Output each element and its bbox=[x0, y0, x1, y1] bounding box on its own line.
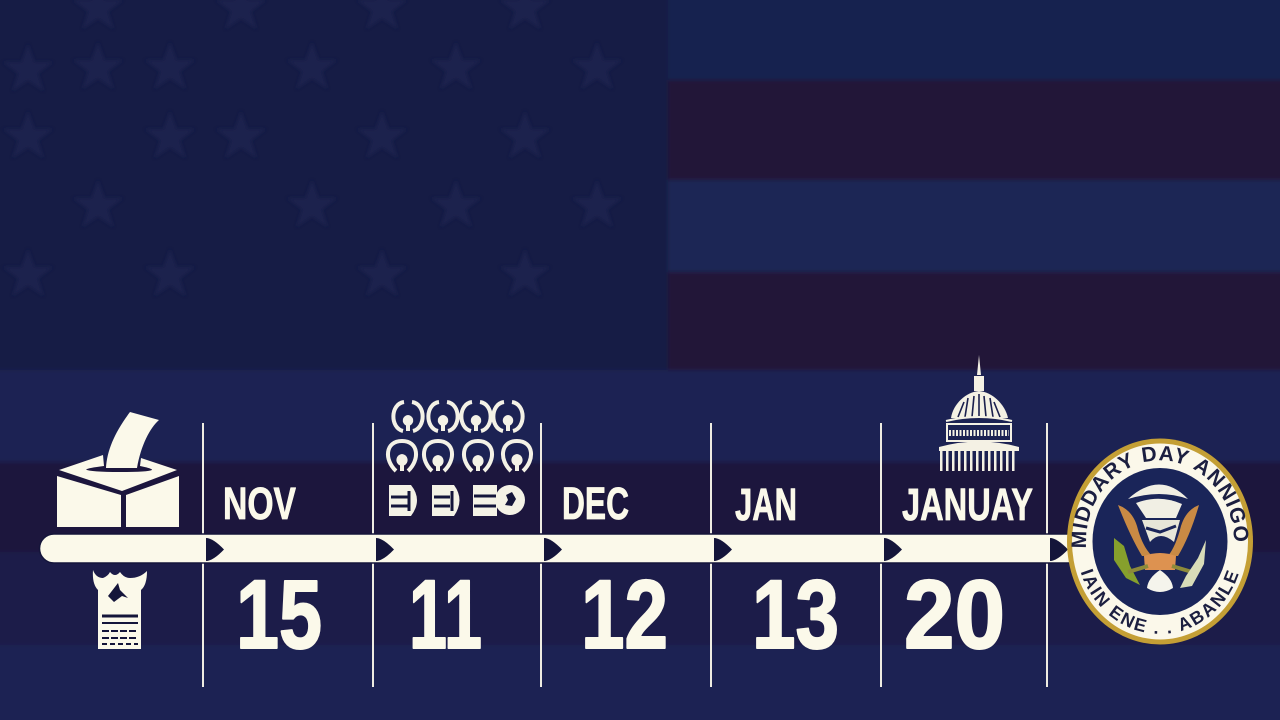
icon: electoral ballot sheet bbox=[93, 570, 147, 649]
date: 11: 1 bbox=[444, 560, 482, 669]
icon: group of electors bbox=[388, 402, 531, 516]
date: 15: 15 bbox=[236, 560, 322, 669]
icon: ballot box bbox=[57, 412, 179, 527]
month label: NOV: NOV bbox=[223, 478, 296, 529]
timeline bar with markers bbox=[40, 423, 1075, 687]
date: 20: 20 bbox=[904, 560, 1005, 669]
month label: DEC: DEC bbox=[562, 478, 629, 529]
date: 11: 1 bbox=[409, 560, 447, 669]
seal lettering: IAIN ENE . . ABANLE bbox=[1080, 568, 1239, 634]
month label: JANUARY: JANUAY bbox=[902, 479, 1033, 530]
seal lettering: MIDDARY DAY ANNIGO bbox=[1072, 446, 1248, 548]
icon: US Capitol dome bbox=[939, 355, 1019, 461]
seal lettering bbox=[1072, 446, 1248, 634]
seal eagle bbox=[1114, 484, 1206, 592]
date: 13: 13 bbox=[752, 560, 839, 669]
presidential seal bbox=[1067, 438, 1253, 644]
month label: JAN: JAN bbox=[735, 479, 797, 530]
date: 12: 12 bbox=[581, 560, 668, 669]
